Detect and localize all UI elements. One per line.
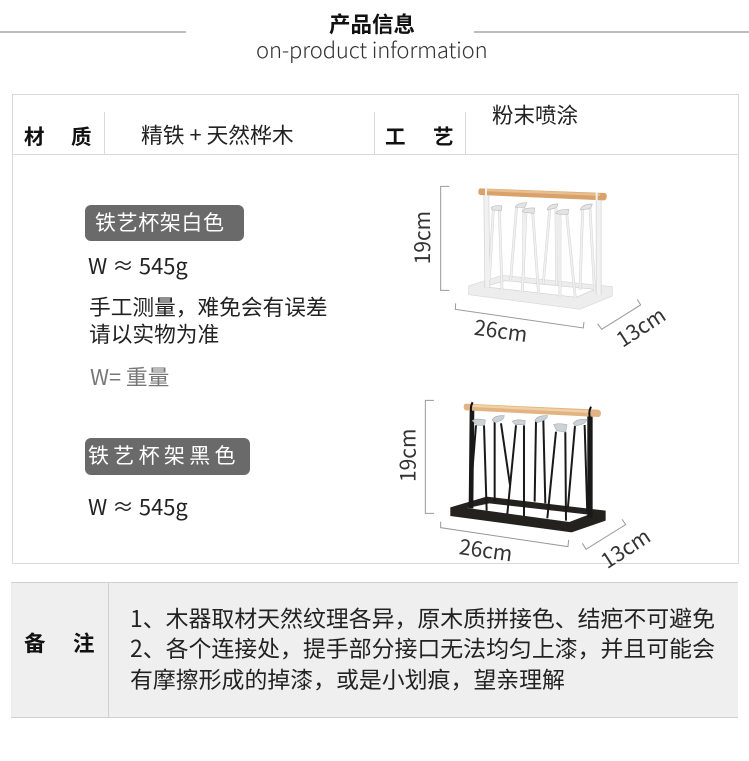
cell divider 3	[465, 112, 466, 154]
label: craft: 工	[385, 120, 406, 150]
uprights and cup arms	[470, 410, 590, 521]
cell divider 1	[104, 112, 105, 154]
panel: remarks	[11, 582, 738, 718]
note: measurement line 2: 请以实物为准	[89, 318, 219, 349]
weight: black rack: W ≈ 545g	[88, 491, 188, 522]
badge text: white rack: 铁艺杯架白色	[95, 207, 225, 237]
panel: specification table	[12, 94, 739, 564]
wooden handle	[464, 404, 601, 417]
subtitle: on-product information	[256, 33, 488, 65]
cell divider 2	[374, 112, 375, 154]
cup holder tips	[472, 416, 587, 432]
diagram: black rack: 13cm	[595, 521, 656, 575]
wooden handle	[478, 188, 607, 200]
label: remarks: 备	[24, 627, 46, 658]
diagram: white rack: 26cm	[472, 312, 529, 349]
remark line 3: 有摩擦形成的掉漆，或是小划痕，望亲理解	[130, 661, 565, 695]
label: remarks 2: 注	[73, 627, 95, 658]
header rule left	[0, 31, 186, 33]
label: craft 2: 艺	[433, 120, 454, 150]
label: material: 材	[24, 120, 44, 150]
weight: white rack: W ≈ 545g	[88, 250, 188, 281]
note: W meaning: W= 重量	[90, 361, 169, 392]
dimension lines	[425, 400, 626, 549]
value: material: 精铁 + 天然桦木	[141, 119, 294, 150]
label: material 2: 质	[71, 120, 92, 150]
base	[450, 497, 606, 532]
dimension labels: 19cm	[392, 429, 422, 482]
badge text: black rack: 铁艺杯架黑色	[88, 440, 240, 470]
cup holder tips	[491, 203, 592, 215]
badge: black rack	[85, 438, 250, 475]
header rule right	[474, 31, 749, 33]
diagram: black rack: 26cm	[457, 531, 514, 568]
uprights and cup arms fill	[486, 190, 599, 298]
dimension lines	[441, 186, 641, 329]
title: 产品信息	[329, 8, 415, 39]
remark line 1: 1、木器取材天然纹理各异，原木质拼接色、结疤不可避免	[130, 600, 715, 634]
value: craft: 粉末喷涂	[492, 99, 578, 130]
badge: white rack	[85, 205, 244, 241]
remark line 2: 2、各个连接处，提手部分接口无法均匀上漆，并且可能会	[130, 630, 715, 664]
uprights and cup arms outline	[486, 190, 599, 298]
note: measurement: 手工测量，难免会有误差	[89, 291, 328, 322]
remarks divider	[108, 583, 109, 717]
base	[469, 275, 612, 309]
row divider	[13, 154, 738, 155]
dimension labels: 19cm	[407, 211, 437, 264]
diagram: white rack: 13cm	[610, 300, 671, 354]
